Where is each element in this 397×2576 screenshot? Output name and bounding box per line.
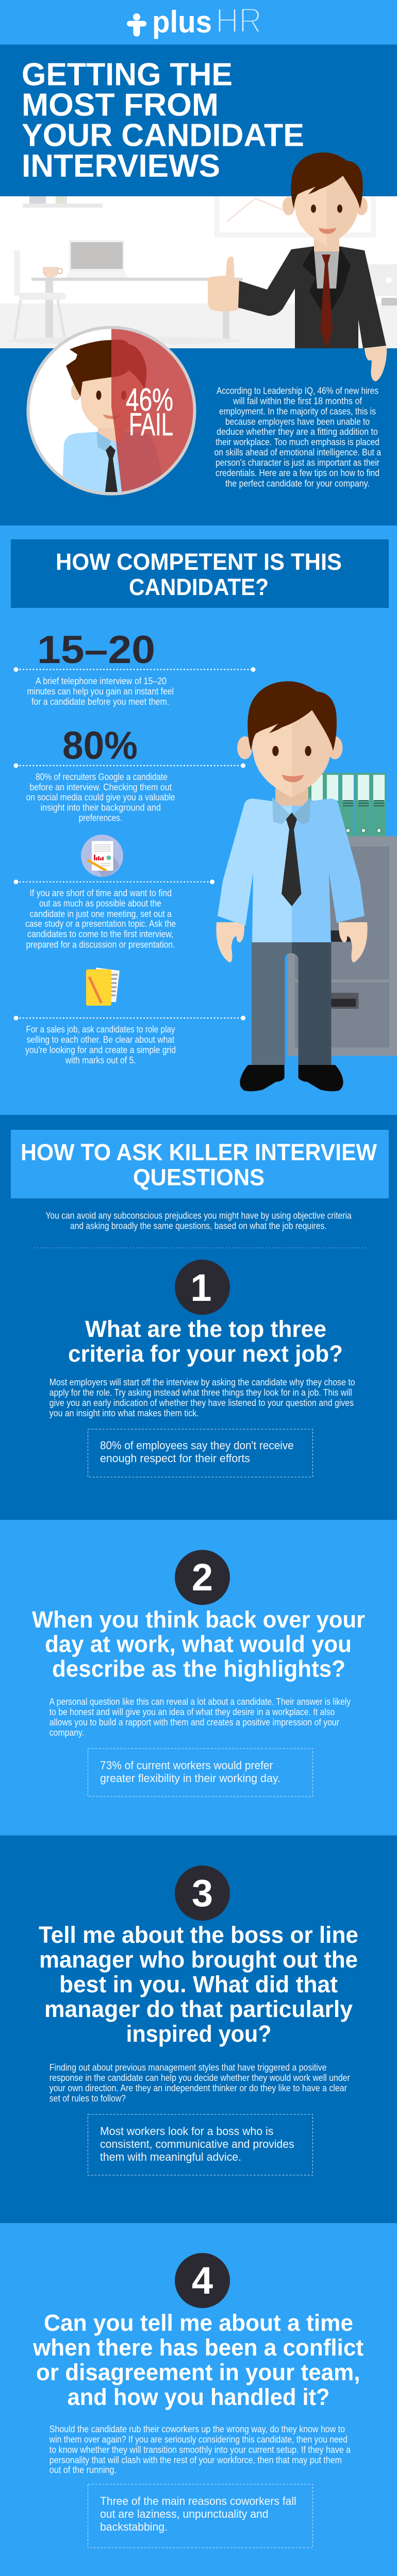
question 4: when there has been a conflict <box>32 2334 363 2361</box>
question 4: to know whether they will transition smoothly into your current setup. If they have a <box>49 2445 351 2455</box>
stat: case study: case study or a presentation topic. Ask the <box>25 919 176 929</box>
question 4: out of the running. <box>49 2465 117 2475</box>
question 1: criteria for your next job? <box>68 1341 343 1367</box>
killer questions heading and intro: and asking broadly the same questions, based on what the job requires. <box>70 1221 327 1231</box>
question 4: out are laziness, unpunctuality and <box>100 2507 269 2520</box>
title panel: GETTING THE <box>22 57 233 92</box>
title panel: INTERVIEWS <box>22 148 220 184</box>
stat: case study: candidates to come to the first interview, <box>27 929 173 939</box>
stat: 80 percent: on social media could give you a valuable <box>26 792 175 803</box>
question 3: Finding out about previous management styles that have triggered a positive <box>49 2062 327 2073</box>
question 3 <box>0 1836 397 2223</box>
question 4 <box>0 2223 397 2576</box>
competence section <box>0 526 397 1115</box>
question 3: set of rules to follow? <box>49 2093 126 2104</box>
stat: 15-20 minutes <box>13 628 256 707</box>
head <box>237 681 343 798</box>
head <box>283 152 368 246</box>
stat: 80 percent: before an interview. Checking them out <box>30 782 172 792</box>
question 1: you an insight into what makes them tick. <box>49 1408 199 1418</box>
filing cabinet and binders <box>288 773 397 1056</box>
stat: sales role play: selling to each other. Be clear about what <box>27 1035 174 1045</box>
stat: 15-20 minutes: for a candidate before you meet them. <box>31 697 169 707</box>
man in suit giving thumbs up <box>208 152 386 348</box>
killer questions heading and intro: HOW TO ASK KILLER INTERVIEW <box>21 1139 377 1165</box>
suit <box>238 246 386 348</box>
failure circle portrait: FAIL <box>129 407 173 443</box>
stat: case study: If you are short of time and want to find <box>30 888 172 899</box>
stat: 80 percent: preferences. <box>79 812 122 823</box>
question 3: response in the candidate can help you decide whether they would work well under <box>49 2073 350 2083</box>
heading panel: how competent: CANDIDATE? <box>129 574 269 600</box>
shirt <box>218 799 292 942</box>
header bar with logo: HR <box>216 1 262 40</box>
stat: case study <box>13 879 214 950</box>
stat: 80 percent: 80% <box>62 724 138 768</box>
question 2: 2 <box>192 1556 213 1599</box>
question 1: apply for the role. Try asking instead what three things they look for in a job. This will <box>49 1387 352 1398</box>
intro text: employment. In the majority of cases, this is <box>219 406 376 416</box>
question 3: your own direction. Are they an independent thinker or do they like to have a clear <box>49 2083 347 2093</box>
stat: 80 percent <box>13 724 245 823</box>
trousers <box>252 942 331 1065</box>
question 1: enough respect for their efforts <box>100 1452 250 1465</box>
killer questions heading and intro <box>0 1115 397 1520</box>
stat: 15-20 minutes: A brief telephone interview of 15–20 <box>36 676 167 686</box>
question 1: give you an early indication of whether they have listened to your question and gives <box>49 1398 354 1408</box>
question 1: Most employers will start off the interview by asking the candidate why they chose to <box>49 1377 355 1387</box>
question 3: Most workers look for a boss who is <box>100 2125 273 2138</box>
icon: folder with pencil <box>86 968 120 1006</box>
hands <box>216 922 368 962</box>
stat: sales role play: with marks out of 5. <box>65 1055 136 1065</box>
question 3: inspired you? <box>126 2021 271 2047</box>
question 1: 80% of employees say they don't receive <box>100 1439 294 1452</box>
question 3: best in you. What did that <box>59 1971 338 1997</box>
killer questions heading and intro: You can avoid any subconscious prejudices you might have by using objective criteria <box>45 1211 352 1221</box>
failure circle portrait <box>28 325 201 500</box>
question 3: manager who brought out the <box>39 1946 358 1973</box>
question 2: day at work, what would you <box>45 1631 352 1657</box>
stat: case study: prepared for a discussion or presentation. <box>26 939 175 950</box>
header bar with logo <box>0 0 397 44</box>
question 2: greater flexibility in their working day. <box>100 1772 280 1785</box>
stat: sales role play <box>13 1016 245 1065</box>
stat: 15-20 minutes: 15–20 <box>37 628 155 672</box>
intro text: deduce whether they are a fitting addition to <box>217 427 378 437</box>
icon: document with pencil <box>81 835 123 877</box>
question 2: describe as the highlights? <box>52 1656 345 1682</box>
intro text: because employers have been unable to <box>225 416 370 427</box>
question 4: personality that will clash with the rest of your workforce, then that may put them <box>49 2455 342 2465</box>
title panel: MOST FROM <box>22 88 219 123</box>
heading panel: how competent <box>11 539 389 608</box>
intro panel <box>27 326 387 496</box>
question 4: Three of the main reasons coworkers fall <box>100 2495 296 2507</box>
question 2: to be honest and will give you an idea of what they desire in a workplace. It also <box>49 1707 335 1717</box>
intro text: will fail within the first 18 months of <box>233 396 362 406</box>
46% fail label: 46% <box>126 382 173 418</box>
question 3: manager do that particularly <box>44 1996 353 2022</box>
question 4: Can you tell me about a time <box>44 2310 353 2336</box>
stat: case study: out as much as possible about the <box>39 899 161 909</box>
question 2: When you think back over your <box>32 1606 365 1633</box>
title panel <box>0 44 397 196</box>
header bar with logo: plus <box>152 5 212 39</box>
intro text: the perfect candidate for your company. <box>225 478 370 488</box>
question 4: Should the candidate rub their coworkers up the wrong way, do they know how to <box>49 2424 345 2434</box>
stat: sales role play: you're looking for and create a simple grid <box>25 1045 176 1055</box>
question 4: or disagreement in your team, <box>36 2359 360 2385</box>
question 2 <box>0 1520 397 1836</box>
question 1: 1 <box>190 1266 212 1309</box>
shoes <box>240 1065 285 1091</box>
question 1: What are the top three <box>85 1316 326 1342</box>
stat: 80 percent: 80% of recruiters Google a candidate <box>36 772 168 782</box>
intro text <box>214 386 382 488</box>
question 4: backstabbing. <box>100 2520 168 2533</box>
question 3: 3 <box>192 1872 213 1914</box>
stat: 80 percent: insight into their background and <box>41 803 161 813</box>
question 1 <box>49 1260 355 1477</box>
thumbs-up hand <box>208 257 240 312</box>
stat: case study: candidate in just one meeting, set out a <box>30 909 172 919</box>
question 4: and how you handled it? <box>68 2384 330 2410</box>
standing candidate <box>216 681 368 1091</box>
stat: 15-20 minutes: minutes can help you gain an instant feel <box>27 686 174 697</box>
question 2: A personal question like this can reveal a lot about a candidate. Their answer is likely <box>49 1697 351 1707</box>
question 2: allows you to build a rapport with them and creates a positive impression of your <box>49 1717 339 1727</box>
question 2: company. <box>49 1727 84 1738</box>
question 2: 73% of current workers would prefer <box>100 1759 273 1772</box>
heading panel: how competent: HOW COMPETENT IS THIS <box>56 549 342 575</box>
question 3: consistent, communicative and provides <box>100 2138 294 2150</box>
question 3: Tell me about the boss or line <box>39 1922 358 1948</box>
question 4: 4 <box>192 2259 213 2302</box>
question 4: win them over again? If you are seriously considering this candidate, then you need <box>49 2434 348 2445</box>
stat: sales role play: For a sales job, ask candidates to role play <box>26 1024 175 1035</box>
right hand of suited man <box>365 346 387 381</box>
title panel: YOUR CANDIDATE <box>22 118 304 154</box>
killer questions heading and intro: QUESTIONS <box>133 1164 264 1191</box>
question 3: them with meaningful advice. <box>100 2150 241 2163</box>
office scene background <box>0 196 397 348</box>
